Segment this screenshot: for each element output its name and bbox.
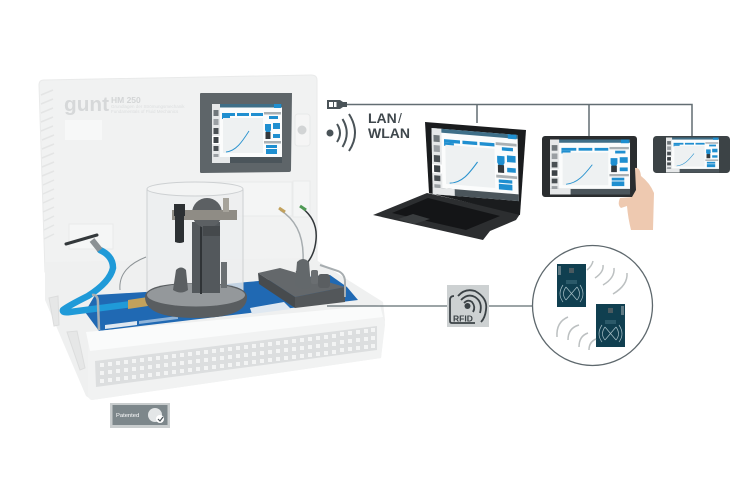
tablet screen — [550, 140, 630, 194]
connector box — [293, 181, 310, 217]
back panel — [39, 75, 317, 272]
trainer unit — [39, 75, 385, 400]
scale slider — [203, 226, 220, 236]
transparent cylinder — [147, 182, 243, 302]
hand holding tablet — [619, 168, 654, 230]
valve lever — [66, 235, 100, 250]
weir column — [192, 222, 227, 294]
rfid icon — [447, 285, 489, 327]
icon: wifi signal — [326, 114, 355, 151]
radio waves bottom — [557, 317, 596, 350]
lan wlan label — [368, 110, 410, 141]
laptop — [373, 122, 526, 240]
type plate — [65, 120, 102, 140]
radio waves top — [587, 261, 627, 294]
smartphone — [653, 136, 730, 173]
blue hose — [63, 250, 132, 312]
network connection lines — [345, 104, 692, 136]
plate handle — [92, 295, 99, 330]
lan wlan label: LAN — [368, 110, 397, 126]
gauge block — [258, 259, 345, 308]
product subtitle english: Fundamentals of Fluid Mechanics — [111, 109, 179, 114]
patented label: Patented — [116, 413, 139, 419]
emergency button — [295, 114, 310, 146]
rfid detail circle — [532, 246, 652, 366]
clamp bar — [172, 210, 237, 220]
product title: HM 250 — [111, 95, 141, 105]
gunt logo: gunt — [64, 94, 109, 116]
front white housing — [88, 317, 385, 400]
base tray back — [45, 258, 385, 400]
rotary head — [192, 198, 222, 228]
base knobs — [173, 268, 188, 292]
plate sticker — [250, 302, 291, 314]
phone screen — [666, 138, 719, 172]
side ventilation stripes — [41, 90, 54, 239]
rfid board bottom — [596, 304, 625, 347]
blue base plate — [85, 275, 358, 331]
patented badge — [110, 403, 170, 428]
rfid board top — [557, 264, 586, 307]
plate label — [105, 316, 178, 329]
perforated band — [95, 326, 377, 387]
lan wlan label: / — [398, 110, 402, 126]
hose fitting — [128, 297, 148, 309]
left side handles — [49, 296, 85, 370]
tablet — [542, 136, 637, 197]
laptop lid — [425, 122, 526, 215]
product subtitle: Grundlagen der Strömungsmechanik — [111, 104, 185, 109]
cylinder base — [145, 283, 247, 318]
connection diagram on panel — [202, 182, 292, 216]
rfid connection lines — [327, 305, 533, 307]
lan wlan label: WLAN — [368, 125, 410, 141]
touch display — [200, 93, 292, 173]
sensor cables — [120, 206, 316, 290]
upright bracket — [223, 198, 229, 212]
black knob — [174, 204, 185, 243]
icon: lan plug — [327, 100, 347, 109]
hose label — [69, 224, 113, 249]
globe check icon — [148, 408, 164, 423]
keyboard deck — [373, 193, 520, 240]
rfid label: RFID — [453, 314, 473, 324]
laptop screen — [432, 128, 519, 201]
